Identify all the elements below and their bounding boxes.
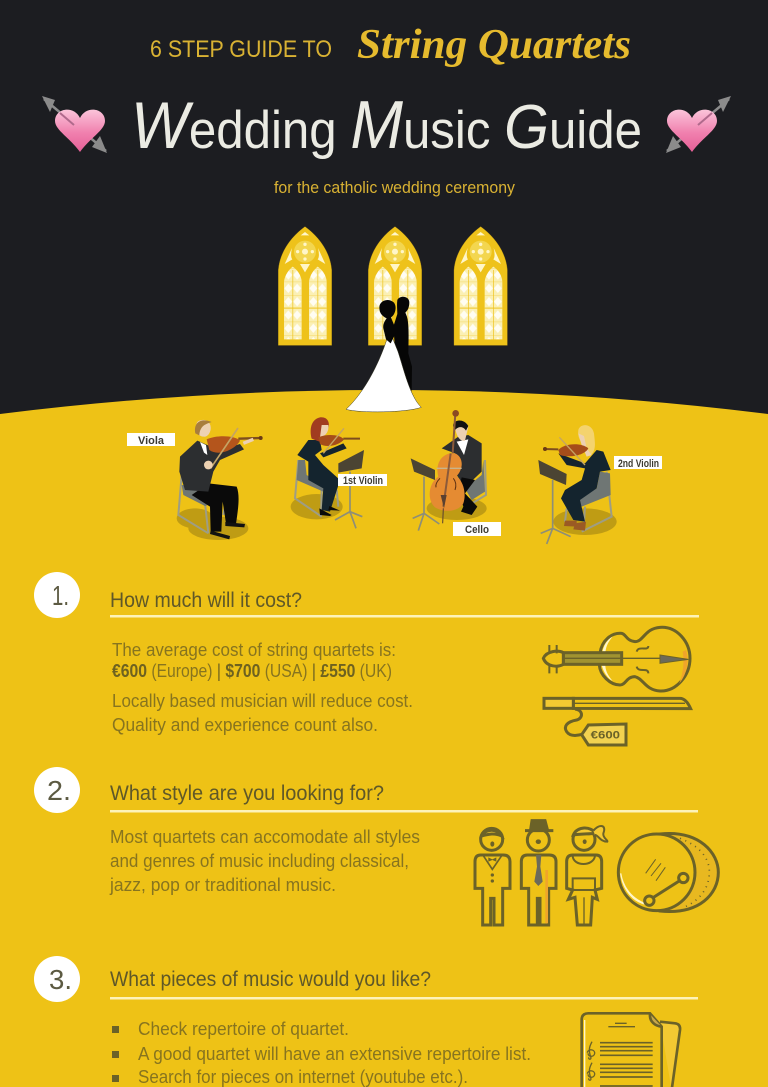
heading 2: What style are you looking for? (110, 782, 384, 805)
label: first violin: 1st Violin (343, 475, 383, 487)
heading 3: What pieces of music would you like? (110, 968, 431, 991)
number badge 1 (34, 572, 80, 618)
main title: Wedding Music Guide (131, 87, 642, 163)
label: second violin (614, 456, 662, 470)
tambourine (618, 834, 718, 911)
body text 2: and genres of music including classical, (110, 851, 409, 871)
bullet list (112, 1019, 531, 1087)
groom (393, 297, 412, 391)
label: second violin: 2nd Violin (618, 458, 659, 470)
woman with ponytail (567, 826, 607, 925)
icon: violin, bow and price tag (543, 627, 691, 745)
number badge 2 (34, 767, 80, 813)
subtitle: 6 step guide to: 6 STEP GUIDE TO (150, 36, 332, 63)
script subtitle: String Quartets: String Quartets (357, 22, 631, 68)
label: viola: Viola (138, 435, 165, 447)
musician: cello (411, 410, 487, 531)
background: yellow floor panel (0, 390, 768, 1087)
number badge 2: 2. (47, 775, 71, 806)
number badge 1: 1. (52, 580, 69, 611)
icon: left heart with arrow (42, 96, 107, 153)
musician: viola (177, 420, 263, 540)
church windows (278, 227, 507, 345)
section 1: cost (34, 572, 699, 745)
bullet list: Check repertoire of quartet. (138, 1019, 349, 1039)
label: viola (127, 433, 175, 447)
man with hat and tie (521, 821, 556, 925)
bride upper body and hair (379, 300, 396, 343)
body text 2: jazz, pop or traditional music. (109, 875, 336, 895)
icon: singers and tambourine (475, 821, 718, 925)
body text 2 (109, 827, 420, 895)
section 3: pieces of music (34, 956, 698, 1087)
number badge 3 (34, 956, 80, 1002)
bride and groom (346, 297, 421, 412)
icon: sheet music (582, 1013, 680, 1087)
heading 1: How much will it cost? (110, 589, 302, 612)
section 2: style (34, 767, 718, 925)
body text 1: Locally based musician will reduce cost. (112, 691, 413, 711)
body text 1: The average cost of string quartets is: (112, 640, 396, 660)
body text 1: Quality and experience count also. (112, 715, 378, 735)
label: cello (453, 522, 501, 536)
number badge 3: 3. (49, 964, 72, 995)
musician: first violin (291, 417, 364, 528)
tagline: for the catholic wedding ceremony (274, 178, 515, 197)
man with bow tie (475, 828, 510, 925)
body text 2: Most quartets can accomodate all styles (110, 827, 420, 847)
musician: second violin (538, 425, 617, 544)
bullet list: A good quartet will have an extensive repertoire list. (138, 1044, 531, 1064)
body text 1: €600 (Europe) | $700 (USA) | £550 (UK) (112, 661, 392, 681)
label: cello: Cello (465, 524, 489, 536)
bullet list: Search for pieces on internet (youtube etc.). (138, 1067, 468, 1087)
body text 1 (112, 640, 413, 735)
icon: violin, bow and price tag: €600 (591, 730, 620, 742)
background: dark upper panel (0, 0, 768, 440)
bride dress (346, 338, 421, 412)
icon: right heart with arrow (666, 96, 731, 153)
